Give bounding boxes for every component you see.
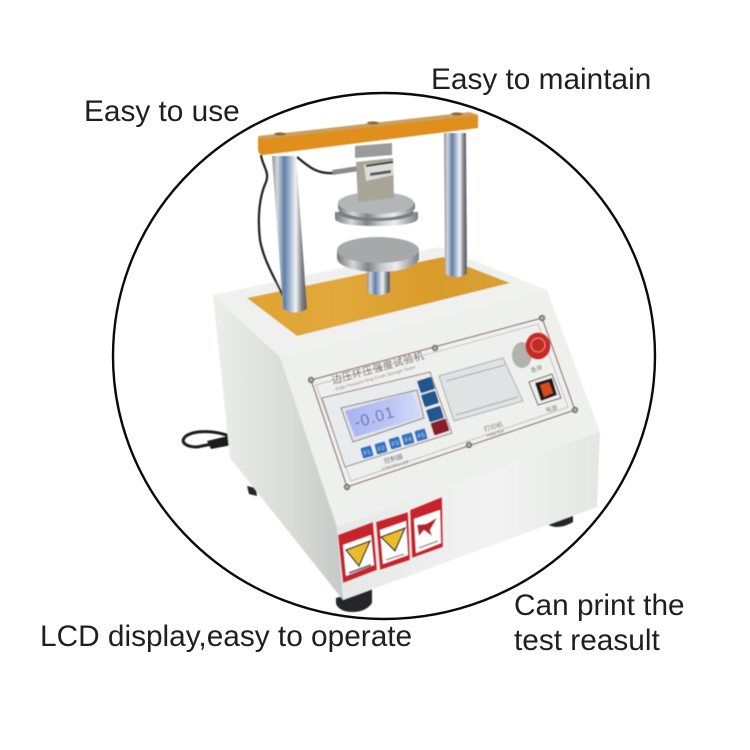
controller caption: 控制器 (383, 451, 404, 466)
warning label 2 (376, 512, 410, 570)
orange base plate (247, 257, 510, 336)
lcd screen (345, 392, 422, 437)
upper sensor cable and connector (297, 157, 359, 175)
machine top surface (213, 247, 547, 357)
function keys F1 to F5: F5 (417, 432, 426, 440)
stop caption: 急停 (530, 364, 543, 375)
left pillar (272, 156, 307, 312)
label: lcd display: LCD display,easy to operate (40, 620, 412, 653)
function keys F1 to F5: F4 (404, 436, 413, 444)
left sensor cable (259, 155, 283, 296)
function keys F1 to F5 (360, 428, 428, 459)
warning label 3 (410, 497, 443, 558)
label: can print the test result: Can print the (514, 589, 685, 622)
printer caption: 打印机 (483, 419, 504, 434)
machine slanted control face (280, 290, 600, 527)
printer (439, 358, 523, 421)
label: can print the test result (514, 589, 685, 657)
power switch (529, 374, 561, 405)
side menu keys (417, 377, 450, 436)
control panel frame (311, 318, 575, 487)
controller panel (322, 372, 452, 471)
machine left side face (213, 295, 343, 600)
lower platen column (367, 262, 390, 295)
function keys F1 to F5: F1 (363, 449, 372, 457)
lcd reading: -0.01 (352, 404, 397, 432)
label: easy to maintain: Easy to maintain (431, 63, 651, 96)
emergency stop button (512, 332, 550, 368)
panel screws (308, 315, 578, 490)
power cord and plug (183, 430, 243, 454)
function keys F1 to F5: F3 (391, 440, 400, 448)
lower platen disc (337, 237, 419, 272)
panel title: Edge Pressure Ring Crush Strength Tester (335, 364, 417, 391)
tester machine (183, 112, 600, 612)
orange top beam (258, 112, 478, 155)
controller caption: CONTROLLER (381, 459, 409, 471)
label: easy to use: Easy to use (84, 95, 240, 128)
warning label 1 (338, 522, 377, 583)
machine lower front face (337, 432, 600, 600)
right pillar (444, 133, 467, 277)
printer caption: PRINTER (486, 428, 504, 438)
controller caption (379, 450, 409, 471)
circle outline (113, 93, 655, 619)
panel title: 边压环压强度试验机 (330, 349, 426, 387)
function keys F1 to F5: F2 (377, 445, 386, 453)
load cell and upper platen (335, 143, 418, 226)
feet (247, 486, 573, 612)
label: can print the test result: test reasult (514, 624, 660, 657)
power caption: 电源 (545, 404, 558, 415)
lcd bezel (341, 390, 424, 442)
printer caption (483, 419, 506, 438)
